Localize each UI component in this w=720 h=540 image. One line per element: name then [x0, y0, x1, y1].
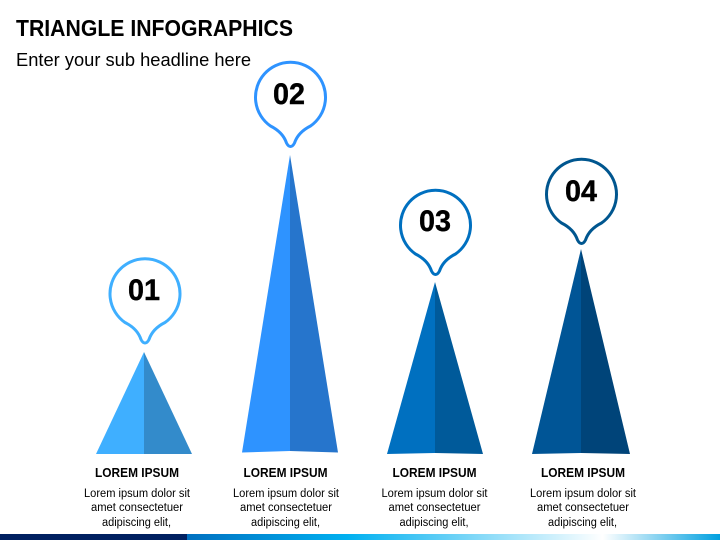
- title: TRIANGLE INFOGRAPHICS: [16, 15, 293, 41]
- description 04: amet consectetuer: [537, 502, 629, 514]
- description 01: amet consectetuer: [91, 502, 183, 514]
- label 04: LOREM IPSUM: [541, 466, 625, 480]
- description 03: Lorem ipsum dolor sit: [382, 488, 488, 500]
- triangle 04: [532, 249, 630, 454]
- description 02: Lorem ipsum dolor sit: [233, 488, 340, 500]
- pin 03: [400, 190, 470, 274]
- item 01: [84, 259, 192, 529]
- label 03: LOREM IPSUM: [392, 466, 476, 480]
- description 03: adipiscing elit,: [400, 517, 468, 529]
- description 02: adipiscing elit,: [251, 517, 320, 529]
- description 04: adipiscing elit,: [548, 517, 617, 529]
- subtitle: Enter your sub headline here: [16, 49, 251, 70]
- pin 02: [256, 62, 326, 146]
- number 04: 04: [565, 175, 597, 208]
- description 01: adipiscing elit,: [102, 517, 171, 529]
- number 03: 03: [419, 205, 451, 238]
- description 03: [382, 488, 488, 529]
- description 01: Lorem ipsum dolor sit: [84, 488, 191, 500]
- item 03: [382, 190, 488, 529]
- triangle 02: [242, 155, 338, 452]
- number 02: 02: [273, 78, 305, 111]
- item 02: [233, 62, 340, 529]
- label 02: LOREM IPSUM: [244, 466, 328, 480]
- item 04: [530, 159, 637, 529]
- description 01: [84, 488, 191, 529]
- description 03: amet consectetuer: [388, 502, 481, 514]
- description 04: [530, 488, 637, 529]
- triangle 03: [387, 282, 483, 454]
- number 01: 01: [128, 274, 160, 307]
- triangle 01: [96, 352, 192, 454]
- description 02: amet consectetuer: [240, 502, 332, 514]
- description 04: Lorem ipsum dolor sit: [530, 488, 637, 500]
- pin 04: [546, 159, 616, 244]
- footer bar: [0, 534, 720, 540]
- description 02: [233, 488, 340, 529]
- pin 01: [110, 259, 180, 343]
- label 01: LOREM IPSUM: [95, 466, 179, 480]
